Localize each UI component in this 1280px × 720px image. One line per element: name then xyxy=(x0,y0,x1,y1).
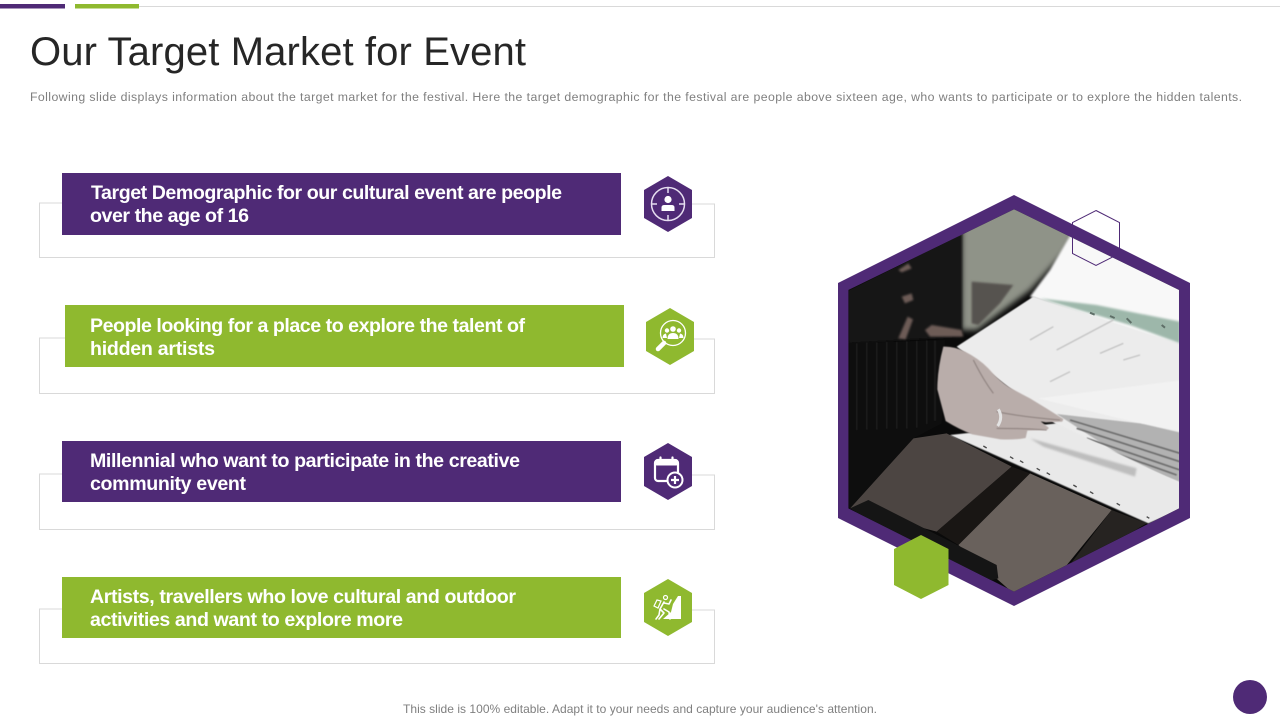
panel: artists and travellers xyxy=(40,577,714,664)
corner circle xyxy=(1233,680,1267,714)
row 3 text xyxy=(90,450,520,495)
row 2 banner xyxy=(65,305,624,367)
green small hexagon xyxy=(894,535,948,599)
photo hexagon: hand turning pages xyxy=(838,195,1190,606)
row 1 text: over the age of 16 xyxy=(90,205,249,227)
row 1 outline card xyxy=(40,203,714,258)
row 4 banner xyxy=(62,577,621,638)
outline small hexagon xyxy=(1072,210,1120,266)
row 2 text: hidden artists xyxy=(90,338,215,360)
row 1 text: Target Demographic for our cultural event are people xyxy=(91,182,562,204)
purple hexagon frame xyxy=(838,195,1190,606)
top accent bars xyxy=(0,4,1280,8)
photo xyxy=(843,200,1183,597)
row 3 banner xyxy=(62,441,621,502)
row 4 text: Artists, travellers who love cultural and outdoor xyxy=(90,586,516,608)
panel: hidden artists xyxy=(40,305,714,394)
row 2 outline card xyxy=(40,338,714,394)
footer note: This slide is 100% editable. Adapt it to your needs and capture your audience's attention. xyxy=(403,702,877,716)
title: Our Target Market for Event xyxy=(30,30,526,74)
row 2 text xyxy=(90,315,525,360)
row 4 text xyxy=(90,586,516,631)
icon: magnifier with people xyxy=(646,308,694,365)
description text: Following slide displays information about the target market for the festival. Here the target demographic for the festival are people above sixteen age, who wants to participate or to explore the hidden talents. xyxy=(30,90,1242,104)
panel: millennial xyxy=(40,441,714,530)
icon: target person xyxy=(644,176,692,232)
row 1 banner xyxy=(62,173,621,235)
row 4 text: activities and want to explore more xyxy=(90,609,403,631)
icon: calendar plus xyxy=(644,443,692,500)
icon: climber xyxy=(644,579,692,636)
row 3 outline card xyxy=(40,474,714,530)
row 3 text: Millennial who want to participate in the creative xyxy=(90,450,520,472)
row 2 text: People looking for a place to explore the talent of xyxy=(90,315,525,337)
row 4 outline card xyxy=(40,609,714,664)
panel: target demographic xyxy=(40,173,714,258)
row 3 text: community event xyxy=(90,473,246,495)
row 1 text xyxy=(90,182,562,227)
